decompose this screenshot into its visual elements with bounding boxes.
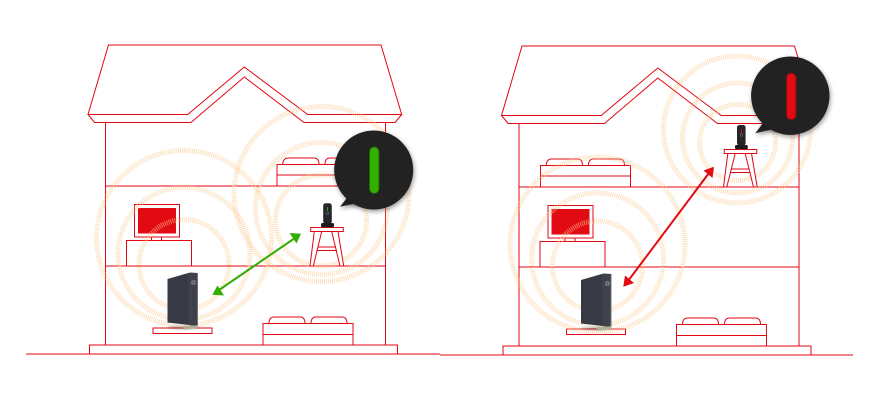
callout: green status: [334, 130, 413, 210]
powerline adapter: [735, 125, 748, 149]
television: [134, 204, 180, 237]
signal rings: router: [96, 150, 272, 326]
router shelf: [566, 329, 626, 334]
powerline adapter: [321, 203, 334, 227]
foundation: [503, 346, 811, 355]
house: good signal: [88, 45, 413, 354]
upstairs bed: [277, 158, 367, 186]
arrow: strong link: [212, 233, 301, 296]
router: [580, 274, 612, 330]
foundation: [90, 345, 398, 354]
stool: [724, 150, 757, 187]
signal rings: adapter: [234, 106, 409, 282]
roof: [502, 46, 815, 124]
router shelf: [153, 328, 212, 334]
desk: [126, 237, 192, 266]
house: weak signal: [502, 46, 830, 355]
signal rings: adapter: [664, 56, 810, 203]
walls and floors: [519, 124, 799, 346]
desk: [540, 238, 605, 267]
callout: red status: [751, 56, 830, 135]
roof: [88, 45, 402, 122]
arrow: weak link: [623, 167, 714, 287]
television: [548, 206, 593, 238]
signal rings: router: [510, 157, 685, 332]
downstairs bed: [676, 318, 766, 346]
upstairs bed: [540, 159, 630, 187]
ground line: left: [26, 353, 440, 355]
router: [167, 272, 199, 330]
ground line: right: [440, 354, 853, 356]
stool: [310, 228, 344, 266]
walls and floors: [106, 122, 386, 345]
downstairs bed: [263, 317, 353, 345]
